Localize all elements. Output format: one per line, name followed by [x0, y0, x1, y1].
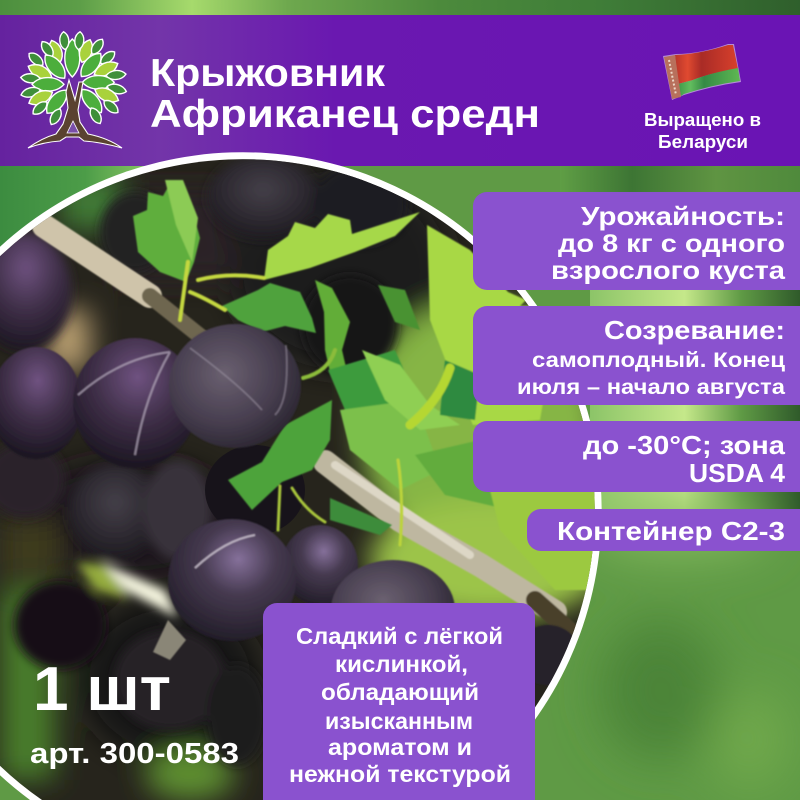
logo: tree [20, 31, 128, 148]
tree leaves [20, 31, 128, 127]
quantity: 1 шт [33, 655, 171, 724]
title: Африканец средн [150, 93, 540, 136]
panel: ripening [473, 306, 800, 405]
branch [44, 226, 580, 640]
panel: yield: Урожайность: [581, 201, 785, 231]
panel: taste description: Сладкий с лёгкой [296, 623, 503, 649]
leaves [133, 180, 600, 590]
header band [0, 15, 800, 166]
panel: container: Контейнер С2-3 [557, 516, 785, 546]
photo circle: gooseberry branch [0, 152, 610, 800]
panel: container [527, 509, 800, 551]
title [150, 52, 540, 136]
panel: taste description: обладающий [321, 679, 479, 705]
panel: ripening: Созревание: [604, 315, 785, 345]
icon: Belarus flag [663, 44, 741, 100]
panel: yield: взрослого куста [551, 257, 786, 285]
panel: yield [473, 192, 800, 290]
main berries [0, 324, 580, 685]
panel: hardiness: USDA 4 [689, 458, 786, 488]
panel: taste description: изысканным [325, 708, 473, 734]
panel: taste description: нежной текстурой [289, 761, 511, 787]
panel: yield: до 8 кг с одного [558, 230, 785, 258]
panel: ripening: июля – начало августа [517, 376, 785, 399]
label: grown in Belarus: Выращено в [644, 110, 761, 130]
panel: taste description: ароматом и [328, 734, 472, 760]
panel: taste description [263, 603, 535, 800]
label: grown in Belarus [644, 110, 761, 152]
dark berry behind leaf [205, 445, 305, 535]
blurred background of the photo [0, 170, 610, 800]
article number: арт. 300-0583 [30, 738, 239, 770]
panel: taste description: кислинкой, [335, 651, 468, 677]
label: grown in Belarus: Беларуси [658, 132, 748, 152]
panel: hardiness: до -30°С; зона [583, 430, 786, 460]
panel: ripening: самоплодный. Конец [532, 349, 785, 372]
title: Крыжовник [150, 52, 385, 95]
blurred far berries [0, 156, 408, 765]
tree trunk and roots [28, 80, 122, 148]
panel: hardiness [473, 421, 800, 492]
